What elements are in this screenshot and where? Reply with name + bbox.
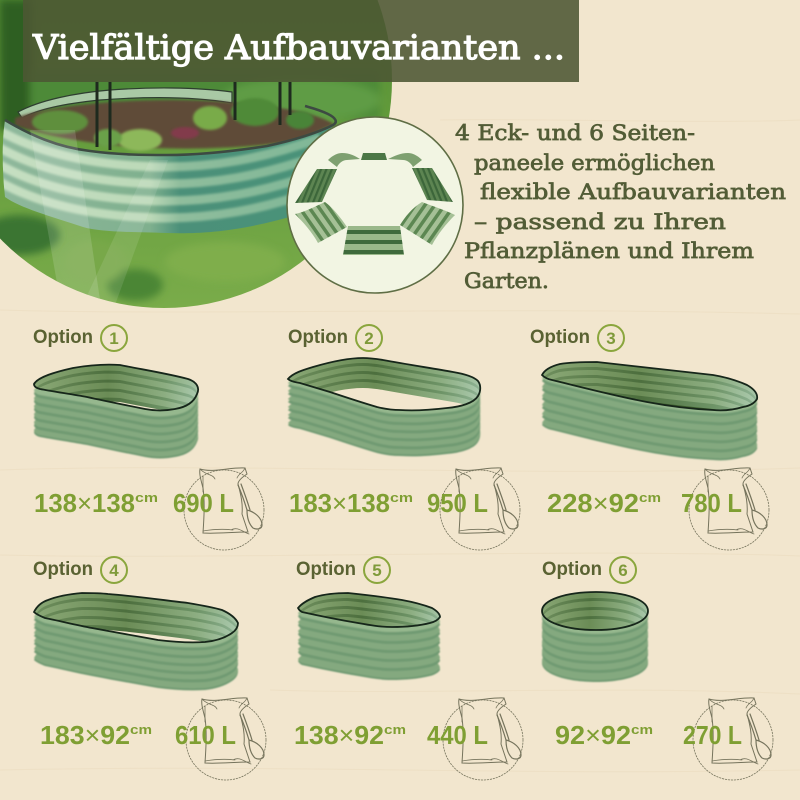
top-right corner piece — [388, 153, 422, 167]
icon: soil bag 780 L — [681, 468, 769, 550]
photo bed wall — [0, 106, 340, 240]
icon: soil bag 950 L — [427, 468, 520, 550]
option 2 label: 2 — [364, 329, 374, 348]
grass shading — [0, 215, 285, 301]
option 2 label — [288, 325, 382, 351]
intro paragraph: Garten. — [464, 269, 549, 294]
icon: soil bag 610 L: 610 L — [175, 720, 236, 750]
option 2 dimensions: cm — [390, 490, 413, 505]
icon: soil bag 440 L: 440 L — [427, 720, 488, 750]
option 4 label — [33, 557, 127, 583]
option 1 bed — [30, 360, 205, 458]
lower-right panel — [400, 202, 455, 245]
bottom panel — [343, 226, 404, 255]
icon: soil bag 610 L — [175, 698, 266, 780]
option 6 bed — [538, 590, 653, 682]
option 1 label: Option — [33, 327, 93, 348]
option 6 label: Option — [542, 559, 602, 580]
upper-right panel — [412, 168, 453, 202]
trellis poles — [97, 82, 290, 150]
option 5 label: 5 — [372, 561, 382, 580]
lower-left panel — [295, 202, 347, 243]
option 5 dimensions: 138×92 — [294, 720, 384, 750]
title: Vielfältige Aufbauvarianten ... — [32, 28, 565, 68]
icon: soil bag 950 L: 950 L — [427, 488, 488, 518]
option 6 label — [542, 557, 636, 583]
icon: soil bag 690 L — [173, 468, 264, 550]
option 2 dimensions: 183×138 — [289, 488, 390, 518]
option 1 dimensions: cm — [135, 490, 158, 505]
option 4 dimensions: 183×92 — [40, 720, 130, 750]
option 6 dimensions: 92×92 — [555, 720, 631, 750]
soil and plants — [15, 98, 334, 151]
translucent V watermark — [30, 130, 168, 305]
panel: option 5 — [294, 557, 523, 780]
panel: option 4 — [30, 557, 266, 780]
option 5 label — [296, 557, 390, 583]
option 3 label: 3 — [606, 329, 616, 348]
icon: soil bag 780 L: 780 L — [681, 488, 742, 518]
intro paragraph: 4 Eck- und 6 Seiten- — [455, 121, 695, 146]
top centre piece — [361, 153, 387, 160]
intro paragraph — [455, 121, 786, 294]
intro paragraph: paneele ermöglichen — [474, 151, 715, 176]
option 4 label: 4 — [109, 561, 119, 580]
option 3 label: Option — [530, 327, 590, 348]
panel: option 1 — [30, 325, 264, 550]
intro paragraph: Pflanzplänen und Ihrem — [464, 239, 754, 264]
panel: option 6 — [538, 557, 773, 780]
option 5 label: Option — [296, 559, 356, 580]
icon: soil bag 270 L: 270 L — [683, 720, 742, 750]
intro paragraph: flexible Aufbauvarianten — [480, 180, 786, 205]
option 3 label — [530, 325, 624, 351]
option 3 dimensions: 228×92 — [547, 488, 639, 518]
option 4 bed — [30, 590, 245, 690]
panel: option 2 — [285, 325, 520, 550]
title band — [23, 0, 579, 82]
option 2 bed — [285, 355, 485, 456]
panel: assembly diagram circle — [287, 117, 463, 293]
option 6 label: 6 — [618, 561, 628, 580]
intro paragraph: – passend zu Ihren — [474, 210, 726, 235]
option 3 dimensions: cm — [639, 490, 661, 505]
foliage behind the bed — [0, 0, 380, 130]
option 2 label: Option — [288, 327, 348, 348]
icon: soil bag 690 L: 690 L — [173, 488, 234, 518]
option 6 dimensions: cm — [631, 722, 653, 737]
upper-left panel — [295, 169, 337, 203]
panel: hero photo of raised bed — [0, 0, 394, 310]
icon: soil bag 270 L — [683, 698, 773, 780]
option 3 bed — [538, 358, 763, 460]
option 1 label — [33, 325, 127, 351]
option 1 dimensions: 138×138 — [34, 488, 135, 518]
top-left corner piece — [328, 153, 360, 167]
option 5 dimensions: cm — [384, 722, 406, 737]
option 1 label: 1 — [109, 329, 119, 348]
panel: option 3 — [530, 325, 769, 550]
option 4 label: Option — [33, 559, 93, 580]
back rim of the bed — [18, 88, 232, 118]
option 5 bed — [295, 590, 445, 680]
option 4 dimensions: cm — [130, 722, 152, 737]
icon: soil bag 440 L — [427, 698, 523, 780]
